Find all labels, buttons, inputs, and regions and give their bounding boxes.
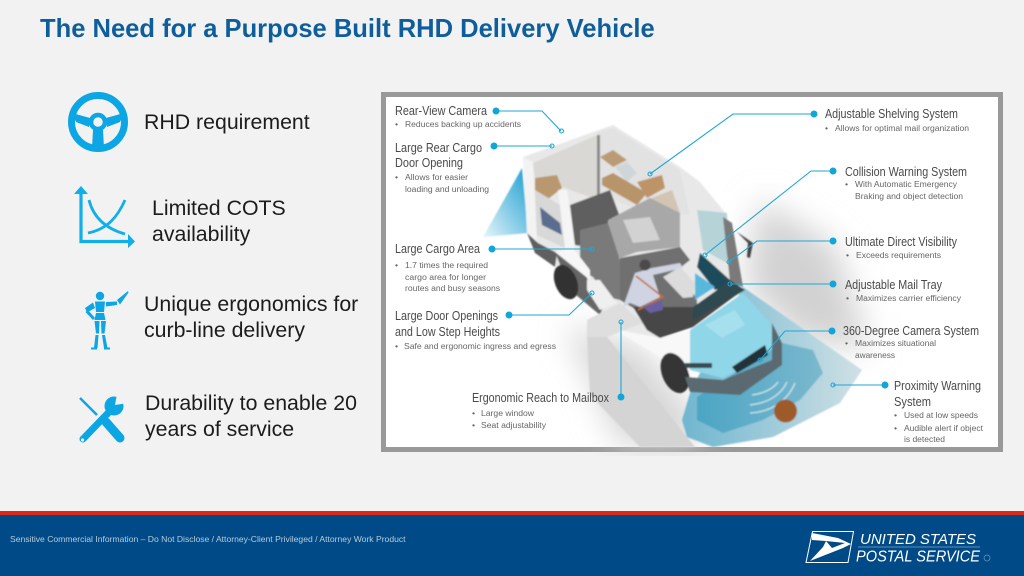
title: The Need for a Purpose Built RHD Delivery Vehicle — [40, 15, 655, 43]
callout labels: Large window — [481, 408, 535, 418]
background shadows — [565, 200, 870, 445]
callout labels: Allows for optimal mail organization — [835, 123, 969, 133]
callout labels: Audible alert if object — [904, 423, 984, 433]
callout labels: Maximizes situational — [855, 338, 936, 348]
text: Durability to enable 20 years of service: Durability to enable 20 — [145, 391, 357, 415]
callout labels: Door Opening — [395, 156, 463, 170]
icon: articulated figure — [85, 291, 128, 350]
callout labels: and Low Step Heights — [395, 325, 500, 339]
USPS logo: POSTAL SERVICE — [856, 548, 980, 566]
callout labels: Adjustable Shelving System — [825, 107, 958, 121]
callout labels: • — [845, 179, 848, 189]
text: Durability to enable 20 years of service — [145, 391, 357, 441]
callout labels: Large Rear Cargo — [395, 141, 482, 155]
red accent line — [0, 511, 1024, 514]
callout labels: Allows for easier — [405, 172, 468, 182]
callout labels: Used at low speeds — [904, 410, 979, 420]
USPS logo: UNITED STATES — [860, 531, 976, 548]
text: RHD requirement: RHD requirement — [144, 110, 310, 134]
callout labels: • — [846, 250, 849, 260]
callout labels: Safe and ergonomic ingress and egress — [404, 341, 557, 351]
callout labels: • — [395, 341, 398, 351]
text: Unique ergonomics for curb-line delivery: Unique ergonomics for — [144, 292, 358, 316]
callout labels: 1.7 times the required — [405, 260, 488, 270]
text: Unique ergonomics for curb-line delivery — [144, 292, 358, 342]
footer band — [0, 511, 1024, 576]
callout labels: Large Cargo Area — [395, 242, 480, 256]
panel: RHD vehicle features diagram — [381, 92, 1003, 454]
callout labels: Maximizes carrier efficiency — [856, 293, 962, 303]
callout labels: Seat adjustability — [481, 420, 547, 430]
callout labels: Adjustable Mail Tray — [845, 278, 943, 292]
callout labels: Ultimate Direct Visibility — [845, 235, 958, 249]
callout labels: • — [894, 410, 897, 420]
footer disclaimer: Sensitive Commercial Information – Do Not Disclose / Attorney-Client Privileged / Attorney Work Product — [10, 534, 406, 544]
callout labels: System — [894, 395, 931, 409]
callout labels: • — [894, 423, 897, 433]
callout labels: Ergonomic Reach to Mailbox — [472, 391, 610, 405]
icon: wrench and screwdriver — [79, 396, 124, 442]
callout labels: • — [472, 408, 475, 418]
callout labels: Exceeds requirements — [856, 250, 942, 260]
text: Limited COTS availability: Limited COTS — [152, 196, 286, 220]
text: Unique ergonomics for curb-line delivery: curb-line delivery — [144, 318, 305, 342]
text: Durability to enable 20 years of service: years of service — [145, 417, 294, 441]
callout labels: • — [825, 123, 828, 133]
callout leader lines — [492, 111, 885, 397]
callout labels: cargo area for longer — [405, 272, 486, 282]
callout labels: • — [395, 260, 398, 270]
callout labels: Rear-View Camera — [395, 104, 487, 118]
callout labels: awareness — [855, 350, 896, 360]
callout labels: • — [846, 293, 849, 303]
callout labels: Braking and object detection — [855, 191, 963, 201]
callout labels: is detected — [904, 434, 945, 444]
callout labels — [395, 104, 984, 444]
callout labels: • — [395, 119, 398, 129]
callout labels: loading and unloading — [405, 184, 489, 194]
text: Limited COTS availability: availability — [152, 222, 250, 246]
callout labels: With Automatic Emergency — [855, 179, 958, 189]
callout labels: Collision Warning System — [845, 165, 967, 179]
USPS logo — [805, 531, 990, 566]
icon: crossing curves chart — [74, 186, 135, 248]
callout labels: 360-Degree Camera System — [843, 324, 979, 338]
van illustration — [483, 125, 862, 447]
callout dots — [488, 108, 888, 400]
callout labels: Reduces backing up accidents — [405, 119, 522, 129]
callout labels: Large Door Openings — [395, 309, 498, 323]
callout labels: • — [845, 338, 848, 348]
callout labels: • — [472, 420, 475, 430]
callout labels: Proximity Warning — [894, 379, 981, 393]
icon: steering wheel — [68, 92, 128, 152]
callout labels: routes and busy seasons — [405, 283, 501, 293]
callout labels: • — [395, 172, 398, 182]
text: Limited COTS availability — [152, 196, 286, 246]
